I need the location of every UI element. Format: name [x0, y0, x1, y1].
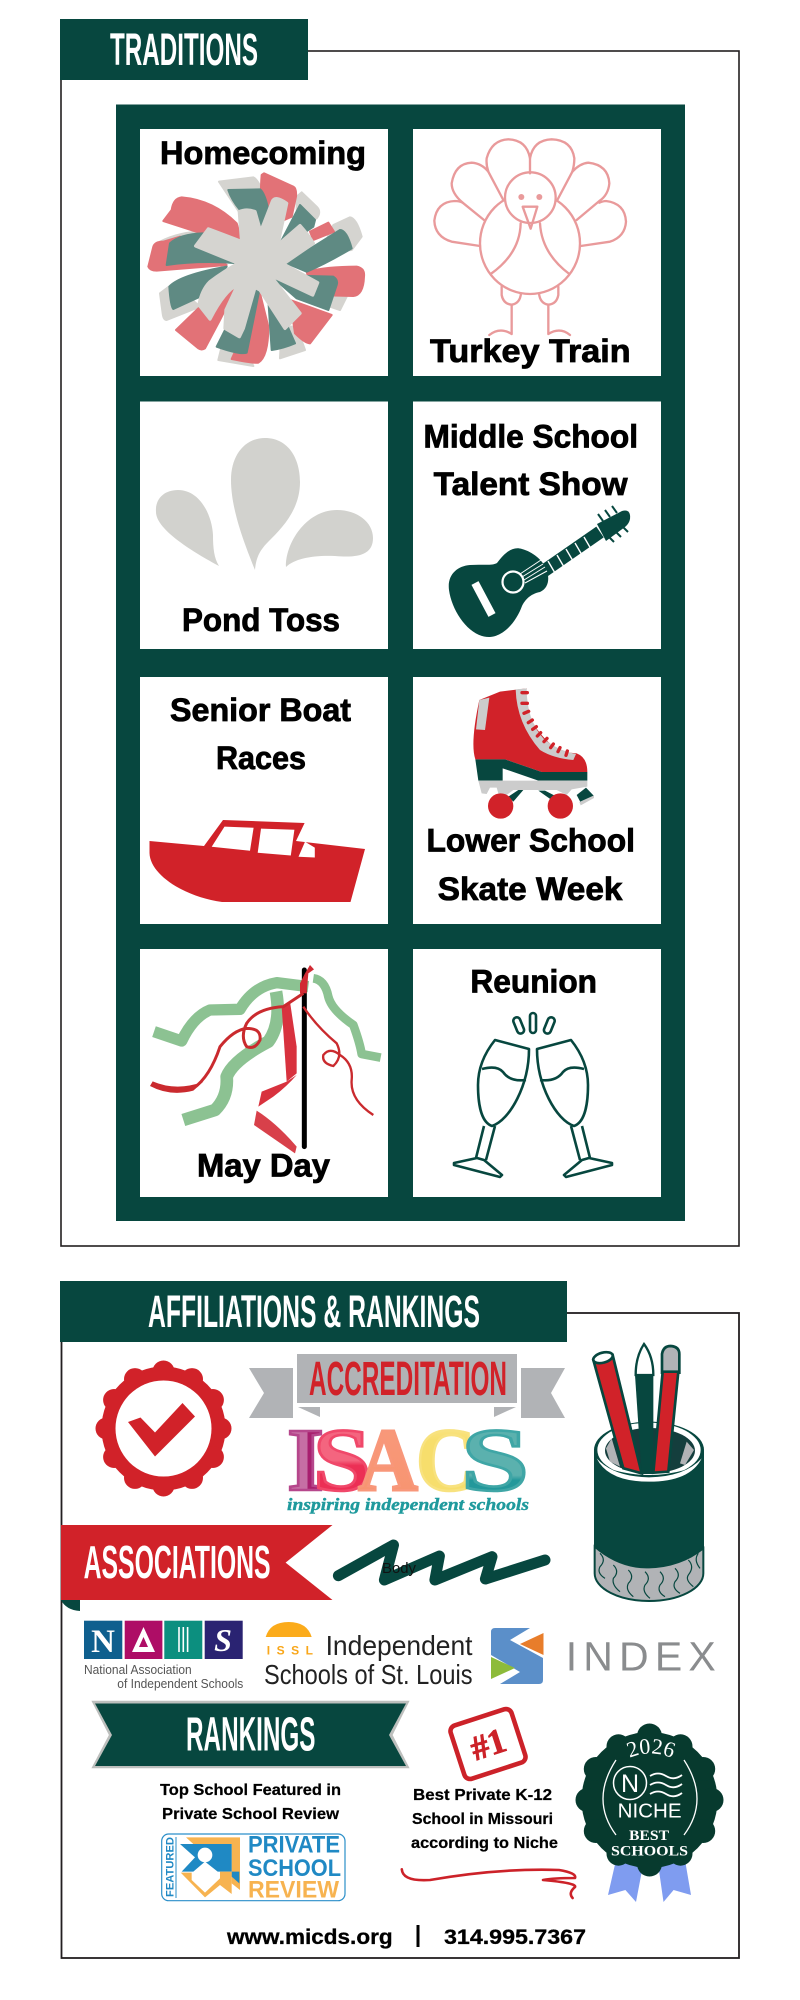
label: middle school talent show: Talent Show: [434, 466, 628, 502]
stray body label: Body: [382, 1560, 416, 1577]
logo: private school review: PRIVATE: [248, 1832, 340, 1859]
logo: ISACS: C: [416, 1411, 476, 1510]
logo: private school review: SCHOOL: [248, 1855, 341, 1882]
label: middle school talent show: Middle School: [424, 418, 638, 454]
footer: contact details: [226, 1925, 586, 1949]
heading: traditions: [60, 19, 308, 80]
banner: associations: ASSOCIATIONS: [84, 1536, 271, 1588]
banner: rankings: [91, 1701, 410, 1768]
icon: maypole ribbons: [150, 965, 381, 1153]
icon: pom-pom: [148, 173, 364, 366]
stamp: number one: [449, 1707, 527, 1781]
label: lower school skate week: Skate Week: [438, 871, 623, 907]
icon: turkey: [434, 139, 626, 335]
scribble: [338, 1545, 545, 1580]
logo: private school review: [162, 1832, 345, 1904]
label: may day: May Day: [197, 1148, 330, 1184]
text: best private school: according to Niche: [411, 1835, 558, 1852]
banner: accreditation: ACCREDITATION: [309, 1353, 507, 1406]
label: reunion: Reunion: [470, 964, 597, 1000]
logo: INDEX: INDEX: [566, 1634, 716, 1680]
text: best private school: Best Private K-12: [413, 1787, 552, 1804]
text: best private school: School in Missouri: [412, 1811, 553, 1828]
logo: NAIS: [84, 1621, 243, 1691]
footer: contact details: www.micds.org: [226, 1926, 393, 1949]
label: pond toss: Pond Toss: [182, 602, 340, 638]
banner: rankings: RANKINGS: [186, 1709, 316, 1762]
ribbon fold: [61, 1600, 80, 1611]
banner: associations: [61, 1525, 332, 1600]
label: homecoming: Homecoming: [160, 135, 366, 171]
logo: NAIS: N: [91, 1624, 115, 1660]
label: turkey train: Turkey Train: [430, 333, 631, 369]
badge: niche best schools: BEST: [629, 1828, 669, 1844]
logo: NAIS: of Independent Schools: [117, 1677, 243, 1691]
icon: roller skate: [473, 688, 594, 819]
heading: affiliations and rankings: AFFILIATIONS & RANKINGS: [148, 1286, 480, 1337]
panel: traditions frame: [61, 51, 739, 1246]
heading: traditions: TRADITIONS: [110, 24, 258, 75]
banner: accreditation: [249, 1353, 565, 1418]
icon: pencil cup: [592, 1344, 704, 1602]
badge: niche best schools: [576, 1724, 724, 1902]
label: lower school skate week: Lower School: [426, 822, 635, 858]
logo: NAIS: S: [214, 1622, 232, 1658]
logo: private school review: REVIEW: [248, 1877, 339, 1904]
icon: boat: [150, 820, 365, 902]
text: top school featured: Private School Review: [162, 1806, 340, 1823]
logo: ISSL: [264, 1622, 473, 1690]
label: senior boat races: Senior Boat: [170, 692, 351, 728]
logo: ISACS: [287, 1411, 529, 1514]
logo: ISACS: A: [358, 1411, 418, 1510]
icon: guitar: [449, 506, 630, 637]
badge: niche best schools: N: [621, 1770, 639, 1798]
logo: ISSL: Schools of St. Louis: [264, 1659, 472, 1690]
panel: affiliations frame: [62, 1313, 739, 1958]
logo: ISACS: I: [287, 1411, 324, 1510]
label: lower school skate week: [426, 822, 635, 907]
badge: niche best schools: NICHE: [618, 1801, 682, 1823]
swoosh underline: [402, 1869, 575, 1898]
stamp: number one: #1: [465, 1721, 511, 1768]
text: top school featured: [160, 1782, 341, 1823]
text: top school featured: Top School Featured in: [160, 1782, 341, 1799]
badge: niche best schools: 2026: [626, 1739, 676, 1758]
panel: traditions grid: [116, 104, 685, 1221]
label: senior boat races: Races: [216, 740, 306, 776]
text: best private school: [411, 1787, 558, 1852]
logo: private school review: FEATURED: [164, 1837, 176, 1897]
logo: ISACS: S: [461, 1411, 529, 1510]
badge: niche best schools: SCHOOLS: [611, 1844, 688, 1860]
icon: accreditation check badge: [96, 1360, 232, 1496]
label: middle school talent show: [424, 418, 638, 502]
logo: ISSL: Independent: [326, 1630, 473, 1661]
icon: champagne glasses: [454, 1013, 612, 1177]
label: senior boat races: [170, 692, 351, 776]
logo: NAIS: National Association: [84, 1663, 192, 1677]
logo: ISACS: S: [313, 1411, 371, 1510]
logo: ISSL: ISSL: [267, 1643, 313, 1657]
icon: water splash: [156, 438, 373, 570]
logo: ISACS: inspiring independent schools: [287, 1495, 529, 1514]
footer: contact details: 314.995.7367: [444, 1926, 586, 1949]
logo: INDEX: [491, 1628, 716, 1684]
heading: affiliations and rankings: [60, 1281, 567, 1342]
